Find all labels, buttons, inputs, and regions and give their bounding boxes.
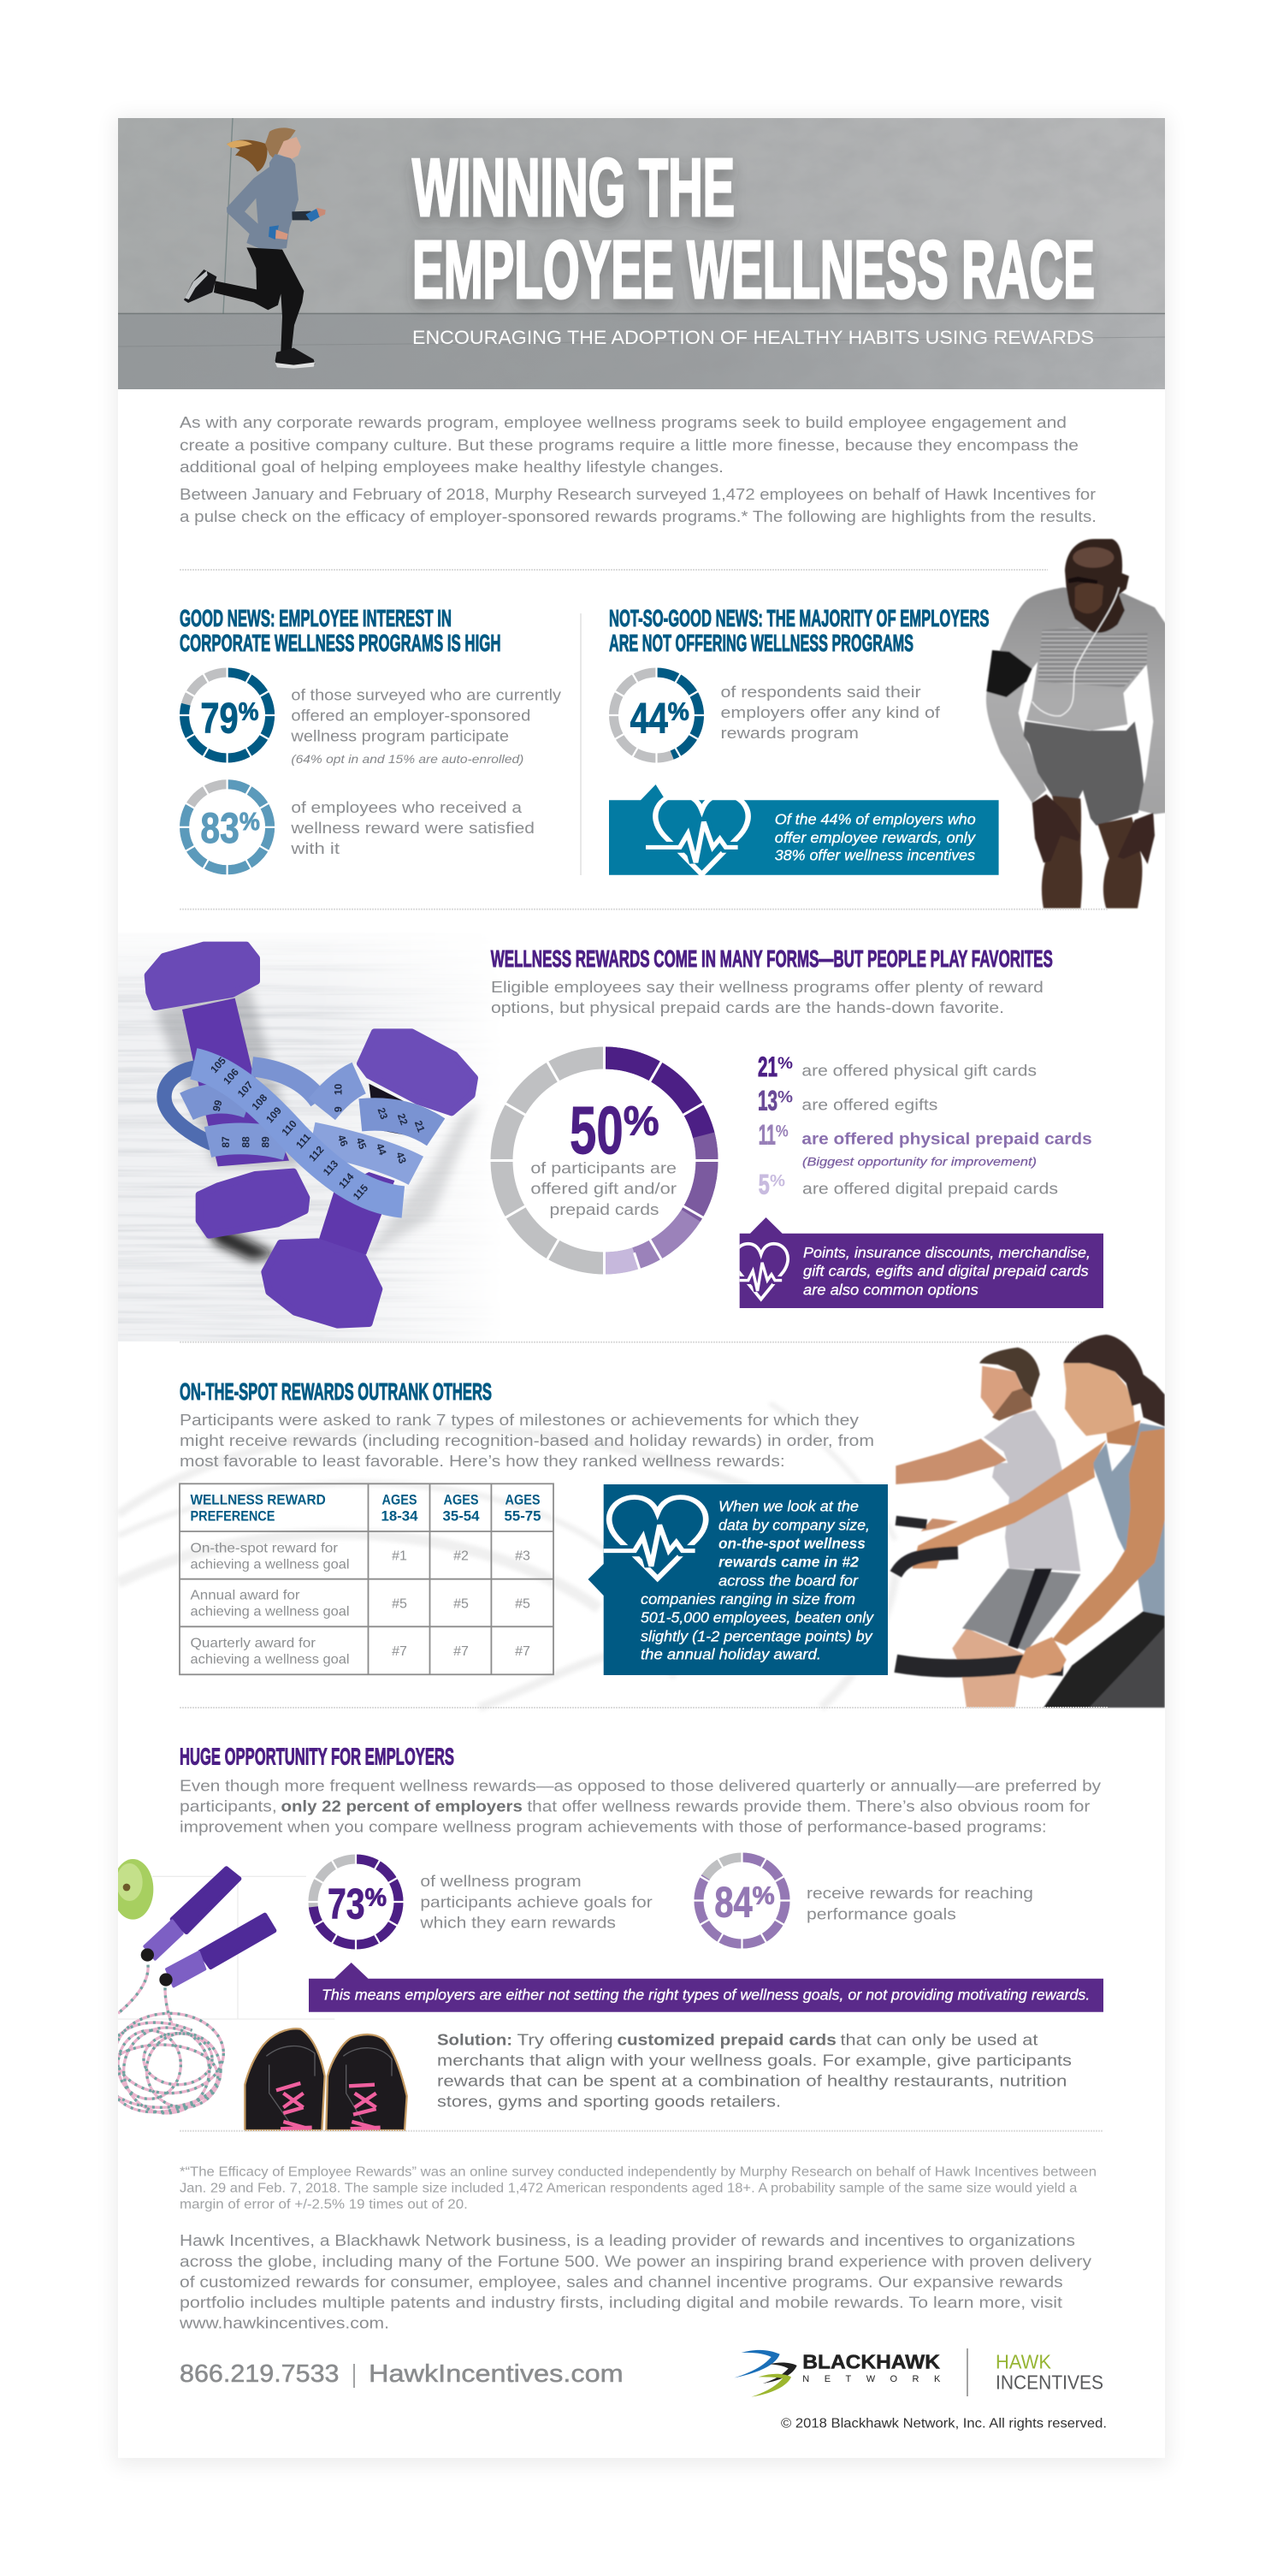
about text: Hawk Incentives, a Blackhawk Network business, is a leading provider of rewards and incentives to organizations <box>180 2231 1075 2249</box>
row: quarterly: #7 <box>392 1644 407 1659</box>
battle ropes <box>896 1520 1063 1668</box>
11% row: 11 <box>759 1119 776 1150</box>
stat text: 73% <box>419 1872 653 1931</box>
table header: 18-34 <box>381 1508 418 1525</box>
21% row <box>758 1051 1037 1082</box>
row: quarterly: Quarterly award for <box>190 1636 316 1650</box>
dumbbell 1 handle <box>182 998 289 1166</box>
donut: 79%: % <box>239 699 259 726</box>
stat text: 84%: performance goals <box>807 1904 956 1922</box>
body text: might receive rewards (including recognition-based and holiday rewards) in order, from <box>180 1431 874 1449</box>
body text <box>180 1411 874 1470</box>
row: on-the-spot <box>190 1541 530 1572</box>
row: quarterly: #7 <box>515 1644 530 1659</box>
intro text <box>180 413 1097 525</box>
table header: AGES <box>381 1491 417 1507</box>
callout text: rewards came in #2 <box>718 1554 859 1571</box>
photo: athlete man <box>986 539 1166 909</box>
callout text: Points, insurance discounts, merchandise, <box>803 1244 1091 1261</box>
jump rope <box>103 1965 223 2113</box>
callout text: slightly (1-2 percentage points) by <box>641 1627 873 1644</box>
tape numbers: 21 <box>412 1119 428 1134</box>
row: on-the-spot: On-the-spot reward for <box>190 1541 339 1555</box>
table header: AGES <box>505 1491 541 1507</box>
body text: only 22 percent of employers <box>281 1797 523 1815</box>
intro text: create a positive company culture. But these programs require a little more finesse, because they encompass the <box>180 436 1079 453</box>
infographic <box>113 115 1169 2466</box>
callout text: companies ranging in size from <box>641 1590 855 1608</box>
21% row: % <box>777 1055 793 1073</box>
donut: 50%: of participants are <box>530 1159 677 1177</box>
intro text: a pulse check on the efficacy of employer-sponsored rewards programs.* The following are highlights from the results. <box>180 507 1097 525</box>
photo: apple, jump rope, shoes <box>103 1859 407 2130</box>
stat text: 79% <box>290 685 562 766</box>
stat text: 79%: (64% opt in and 15% are auto-enrolled) <box>291 752 523 766</box>
donut: 50%: 50 <box>570 1092 624 1168</box>
dumbbell 2 upper head <box>369 1084 432 1138</box>
callout text <box>803 1244 1091 1298</box>
stat text: 79%: of those surveyed who are currently <box>291 685 562 703</box>
tape numbers: 44 <box>374 1142 389 1157</box>
reward list <box>758 1051 1092 1200</box>
solution text: merchants that align with your wellness goals. For example, give participants <box>437 2052 1072 2070</box>
copyright: © 2018 Blackhawk Network, Inc. All rights reserved. <box>781 2417 1107 2431</box>
callout bar <box>309 1963 1103 2012</box>
table header: PREFERENCE <box>190 1508 275 1525</box>
stat text: 83% <box>290 798 535 857</box>
tape numbers: 106 <box>221 1066 241 1087</box>
5% row: 5 <box>759 1170 770 1200</box>
row: annual <box>190 1588 530 1620</box>
donut: 73% <box>303 1849 409 1955</box>
contact line <box>180 2360 624 2388</box>
tape numbers: 113 <box>321 1158 340 1178</box>
tape numbers: 108 <box>249 1092 269 1112</box>
tape numbers: 22 <box>395 1112 411 1127</box>
dumbbell 2 lower head <box>265 1242 379 1324</box>
logo: Blackhawk Network | Hawk Incentives: INCENTIVES <box>996 2371 1103 2393</box>
solution text: that can only be used at <box>840 2031 1038 2049</box>
callout: other options <box>729 1217 1103 1308</box>
heading: NOT-SO-GOOD NEWS: THE MAJORITY OF EMPLOYERS <box>609 605 989 631</box>
donut: 83%: 83 <box>200 804 239 852</box>
donut: 50%: offered gift and/or <box>530 1180 677 1198</box>
donut: 73%: % <box>365 1884 387 1911</box>
heading: ARE NOT OFFERING WELLNESS PROGRAMS <box>609 630 913 656</box>
11% row: % <box>776 1122 789 1140</box>
donut: 50% <box>486 1042 722 1279</box>
tape numbers: 109 <box>263 1104 284 1125</box>
footnote <box>180 2164 1097 2212</box>
tape numbers: 87 <box>220 1136 232 1148</box>
donut: 84%: 84 <box>714 1879 753 1927</box>
callout: company size <box>588 1484 888 1675</box>
donut: 83%: % <box>239 808 260 836</box>
table header: AGES <box>443 1491 479 1507</box>
donut: 44%: % <box>668 699 689 726</box>
woman <box>1044 1611 1165 1708</box>
row: annual: #5 <box>515 1596 530 1611</box>
stat text: 84% <box>807 1884 1033 1922</box>
stat text: 83%: with it <box>290 839 340 857</box>
section: not-so-good news <box>604 605 999 875</box>
stat text: 83%: of employees who received a <box>291 798 523 816</box>
wood background <box>118 945 455 1341</box>
photo: couple with battle ropes <box>896 1335 1165 1708</box>
tape numbers: 43 <box>393 1151 409 1165</box>
card <box>118 118 1165 2458</box>
callout text: on-the-spot wellness <box>718 1535 866 1552</box>
tape numbers: 115 <box>351 1181 370 1202</box>
solution text: customized prepaid cards <box>618 2031 837 2049</box>
stat text: 44%: of respondents said their <box>720 683 921 701</box>
contact line: HawkIncentives.com <box>369 2360 624 2388</box>
body text: Eligible employees say their wellness programs offer plenty of reward <box>491 978 1044 996</box>
donut: 79% <box>174 662 281 768</box>
donut: 84% <box>689 1848 795 1954</box>
body text: options, but physical prepaid cards are the hands-down favorite. <box>491 998 1004 1016</box>
tape numbers: 10 <box>333 1083 345 1095</box>
donut: 83% <box>174 774 281 880</box>
table header: 35-54 <box>443 1508 480 1525</box>
icon: heart pulse <box>604 1495 709 1583</box>
section: on-the-spot rewards <box>180 1378 888 1675</box>
runner photo <box>184 127 326 369</box>
tape numbers: 88 <box>239 1136 251 1148</box>
intro text: Between January and February of 2018, Murphy Research surveyed 1,472 employees on behalf of Hawk Incentives for <box>180 485 1096 503</box>
tape numbers: 89 <box>260 1136 272 1148</box>
13% row: 13 <box>758 1086 777 1116</box>
donut: 73%: 73 <box>328 1880 365 1928</box>
hero banner <box>118 118 1165 389</box>
callout text <box>775 810 976 864</box>
21% row: are offered physical gift cards <box>801 1062 1037 1080</box>
section: wellness rewards <box>486 945 1103 1308</box>
intro text: As with any corporate rewards program, employee wellness programs seek to build employee engagement and <box>180 413 1067 431</box>
tape <box>164 1063 436 1202</box>
heading: GOOD NEWS: EMPLOYEE INTEREST IN <box>180 605 452 631</box>
icon: heart pulse <box>646 795 748 874</box>
callout text: across the board for <box>718 1572 859 1589</box>
row: on-the-spot: #3 <box>515 1549 530 1563</box>
callout text: gift cards, egifts and digital prepaid cards <box>803 1263 1089 1280</box>
about text: www.hawkincentives.com. <box>179 2313 389 2331</box>
card shadow <box>115 116 1168 2466</box>
footnote: Jan. 29 and Feb. 7, 2018. The sample size included 1,472 American respondents aged 18+. A probability sample of the same size would yield a <box>180 2181 1078 2195</box>
solution text: Try offering <box>517 2031 613 2049</box>
solution text: stores, gyms and sporting goods retailers. <box>437 2093 781 2111</box>
footnote: margin of error of +/-2.5% 19 times out of 20. <box>180 2198 468 2212</box>
row: quarterly <box>190 1636 530 1667</box>
13% row: % <box>777 1089 793 1107</box>
donut: 44%: 44 <box>630 695 668 743</box>
table header <box>190 1491 541 1525</box>
stat text: 44% <box>720 683 941 742</box>
about text: across the globe, including many of the Fortune 500. We power an inspiring brand experience with proven delivery <box>180 2252 1092 2270</box>
row: on-the-spot: #2 <box>453 1549 469 1563</box>
apple <box>118 1859 154 1920</box>
body text <box>491 978 1044 1016</box>
row: quarterly: achieving a wellness goal <box>190 1652 349 1667</box>
body text: that offer wellness rewards provide them. There’s also obvious room for <box>527 1797 1090 1815</box>
body text: Participants were asked to rank 7 types of milestones or achievements for which they <box>180 1411 860 1429</box>
row: on-the-spot: achieving a wellness goal <box>190 1557 349 1572</box>
5% row: are offered digital prepaid cards <box>802 1180 1058 1198</box>
logo: Blackhawk Network | Hawk Incentives <box>734 2348 1103 2397</box>
about text <box>179 2231 1092 2331</box>
shoes <box>245 2028 325 2130</box>
table header: 55-75 <box>505 1508 541 1525</box>
body text: improvement when you compare wellness program achievements with those of performance-based programs: <box>180 1817 1047 1835</box>
section: huge opportunity <box>103 1744 1103 2130</box>
logo: Blackhawk Network | Hawk Incentives: NETWORK <box>802 2374 941 2384</box>
donut: 84%: % <box>753 1883 775 1910</box>
title <box>412 142 1095 316</box>
13% row: are offered egifts <box>801 1095 937 1113</box>
row: annual: #5 <box>392 1596 407 1611</box>
heading <box>609 605 989 656</box>
heading: HUGE OPPORTUNITY FOR EMPLOYERS <box>180 1744 454 1770</box>
tape numbers: 99 <box>210 1099 225 1113</box>
tape numbers: 107 <box>235 1079 256 1099</box>
donut: 50%: % <box>624 1099 659 1145</box>
contact line: 866.219.7533 <box>180 2360 339 2388</box>
tape numbers: 111 <box>293 1131 313 1151</box>
stat text: 73%: participants achieve goals for <box>420 1892 653 1910</box>
callout bar: This means employers are either not setting the right types of wellness goals, or not providing motivating rewards. <box>322 1987 1090 2004</box>
callout text: the annual holiday award. <box>641 1645 821 1662</box>
hero texture <box>118 118 1165 389</box>
hero floor <box>118 314 1165 389</box>
section: good news <box>174 605 562 880</box>
heading: CORPORATE WELLNESS PROGRAMS IS HIGH <box>180 630 501 656</box>
11% row <box>759 1119 1092 1169</box>
stat text: 84%: receive rewards for reaching <box>807 1884 1033 1902</box>
logo mark <box>734 2350 797 2397</box>
tape numbers: 105 <box>208 1055 228 1075</box>
stat text: 79%: wellness program participate <box>290 727 509 745</box>
stat text: 44%: rewards program <box>720 724 859 742</box>
callout text: When we look at the <box>718 1498 859 1515</box>
row: annual: Annual award for <box>190 1588 300 1602</box>
dumbbell 1 heads <box>148 945 257 1007</box>
tape numbers: 9 <box>333 1106 345 1112</box>
body text <box>180 1776 1102 1835</box>
body text: participants, <box>180 1797 277 1815</box>
5% row <box>759 1170 1058 1200</box>
dumbbell 2 handle <box>317 1172 394 1255</box>
callout text: Of the 44% of employers who <box>775 810 976 827</box>
body text: most favorable to least favorable. Here’s how they ranked wellness rewards: <box>180 1452 785 1470</box>
stat text: 73%: of wellness program <box>420 1872 582 1890</box>
photo: dumbbells and tape <box>118 941 481 1341</box>
callout text: data by company size, <box>718 1516 870 1533</box>
callout text <box>641 1498 874 1662</box>
subtitle: ENCOURAGING THE ADOPTION OF HEALTHY HABITS USING REWARDS <box>412 327 1094 348</box>
ranking table <box>180 1483 553 1674</box>
tape numbers: 46 <box>335 1134 351 1148</box>
stat text: 79%: offered an employer-sponsored <box>291 707 530 725</box>
stat text: 83%: wellness reward were satisfied <box>290 819 535 837</box>
body text: Even though more frequent wellness rewards—as opposed to those delivered quarterly or annually—are preferred by <box>180 1776 1102 1794</box>
hero wall lines <box>118 118 1165 346</box>
intro text: additional goal of helping employees make healthy lifestyle changes. <box>180 458 724 476</box>
callout text: 38% offer wellness incentives <box>775 847 975 864</box>
callout: wellness incentives <box>609 785 999 875</box>
heading <box>180 605 501 656</box>
tape numbers: 23 <box>375 1106 390 1122</box>
callout text: 501-5,000 employees, beaten only <box>641 1609 874 1626</box>
solution text: Solution: <box>437 2031 512 2049</box>
donut: 44% <box>604 662 710 768</box>
heading: ON-THE-SPOT REWARDS OUTRANK OTHERS <box>180 1378 492 1405</box>
tape numbers <box>208 1055 428 1202</box>
tape numbers: 114 <box>336 1170 357 1191</box>
tape numbers: 112 <box>306 1143 327 1164</box>
about text: portfolio includes multiple patents and industry firsts, including digital and mobile rewards. To learn more, visit <box>180 2293 1062 2311</box>
row: annual: achieving a wellness goal <box>190 1605 349 1620</box>
logo wordmark: BLACKHAWK <box>802 2350 940 2372</box>
row: annual: #5 <box>453 1596 469 1611</box>
11% row: (Biggest opportunity for improvement) <box>802 1155 1037 1169</box>
title: WINNING THE <box>412 142 735 234</box>
logo: Blackhawk Network | Hawk Incentives: HAWK <box>996 2350 1052 2372</box>
row: on-the-spot: #1 <box>392 1549 407 1563</box>
callout text: offer employee rewards, only <box>775 829 976 846</box>
row: quarterly: #7 <box>453 1644 469 1659</box>
man <box>952 1628 1024 1708</box>
handles <box>172 1868 239 1932</box>
donut: 50%: prepaid cards <box>549 1200 659 1218</box>
footnote: *“The Efficacy of Employee Rewards” was an online survey conducted independently by Murphy Research on behalf of Hawk Incentives between <box>180 2164 1097 2179</box>
21% row: 21 <box>758 1051 777 1082</box>
stat text: 44%: employers offer any kind of <box>720 703 941 721</box>
tape numbers: 110 <box>279 1117 299 1138</box>
donut: 79%: 79 <box>200 695 239 743</box>
solution text: rewards that can be spent at a combination of healthy restaurants, nutrition <box>437 2072 1067 2090</box>
stat text: 73%: which they earn rewards <box>419 1913 616 1931</box>
13% row <box>758 1086 937 1116</box>
callout text: are also common options <box>803 1281 979 1298</box>
solution text <box>437 2031 1072 2111</box>
faint rope swoosh background <box>118 1403 896 1708</box>
table header: WELLNESS REWARD <box>190 1491 326 1507</box>
hero concrete wall <box>118 118 1165 314</box>
tape numbers: 45 <box>354 1136 369 1152</box>
5% row: % <box>770 1173 785 1191</box>
icon: heart pulse <box>739 1242 790 1302</box>
about text: of customized rewards for consumer, employee, sales and channel incentive programs. Our expansive rewards <box>180 2272 1063 2290</box>
11% row: are offered physical prepaid cards <box>801 1130 1092 1148</box>
